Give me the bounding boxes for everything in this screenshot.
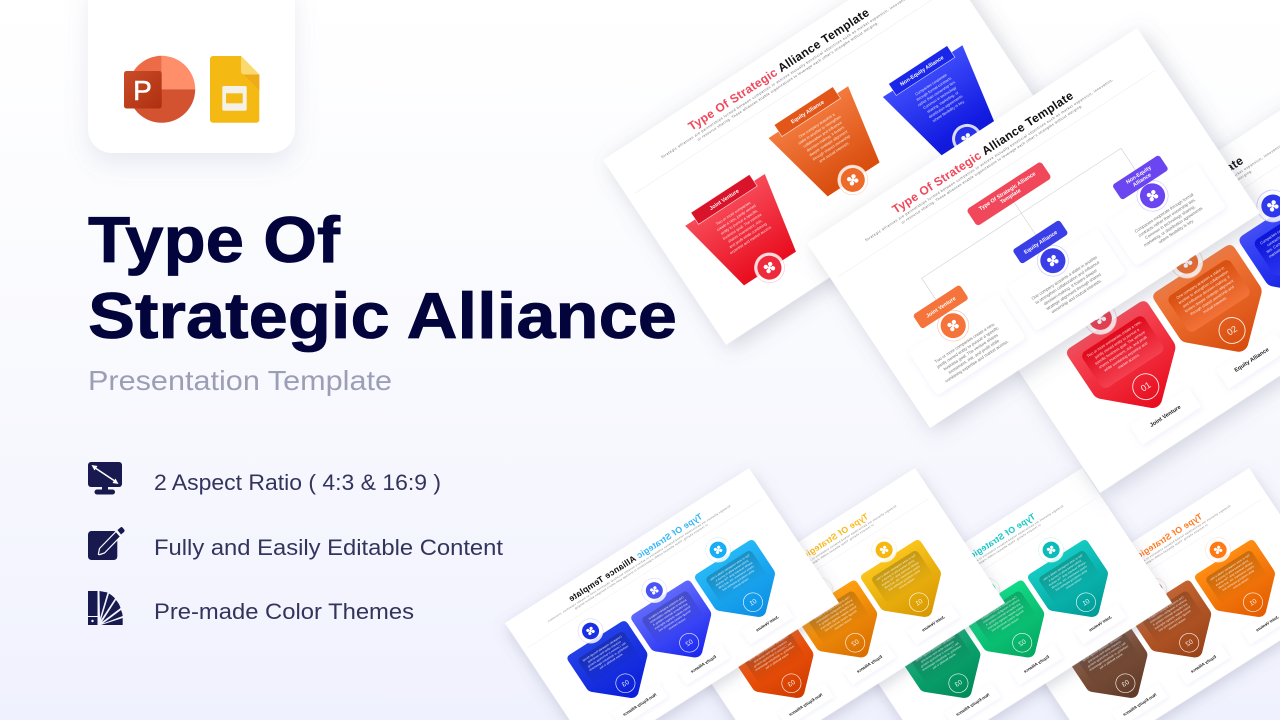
- slide: orange brown theme: where flexibility is key.: [1098, 652, 1123, 670]
- slide: blue theme: market access.: [731, 577, 749, 590]
- slide: orange brown theme: Non-Equity Alliance: [1121, 692, 1157, 717]
- slide: teal green theme: market access.: [1064, 577, 1082, 590]
- slide: orange brown theme: One company acquires a stake in: [1147, 595, 1184, 621]
- slide: yellow orange theme: contracts rather than ownership: [752, 640, 788, 664]
- slide: tree diagram layout: Template: [1000, 188, 1022, 206]
- slide: blue theme: ties. Common in technology sharing,: [586, 641, 626, 669]
- slide: teal green theme: jointly owned entity to pursue a: [1047, 558, 1083, 583]
- icon: color themes fan: [88, 591, 123, 625]
- slide: yellow orange theme: Companies cooperate through formal: [748, 634, 789, 662]
- slide: yellow orange theme: Two or more companies create a new,: [875, 553, 917, 582]
- slide: orange brown theme: or resource sharing. These alliances enable organizations to leverage each other's strengths without merging.: [1073, 523, 1208, 611]
- slide: blue theme: another to strengthen collaboration: [649, 598, 687, 624]
- slide: pentagon cards layout: market access.: [1117, 353, 1141, 370]
- slide: blue theme: One company acquires a stake in: [647, 595, 684, 621]
- slide: blue theme: and influence decision-making. It: [652, 602, 688, 627]
- slide: yellow orange theme: Joint Venture: [920, 614, 946, 633]
- feature: editable: Fully and Easily Editable Content: [154, 535, 504, 560]
- slide: yellow orange theme: and influence decision-making. It: [818, 602, 854, 627]
- slide: trapezoid layout: and profit while combining: [729, 222, 768, 249]
- slide: teal green theme: Non-Equity Alliance: [954, 692, 990, 717]
- slide: teal green theme: Type Of Strategic Alliance Template: [900, 511, 1037, 604]
- slide: blue theme: Joint Venture: [754, 614, 780, 633]
- slide: orange brown theme: jointly owned entity to pursue a: [1214, 558, 1250, 583]
- title: Strategic Alliance: [88, 279, 677, 352]
- slide: blue theme: Strategic alliances are partnerships formed between companies to achieve mutually beneficial objectives such as market expansion, innovation,: [546, 504, 731, 624]
- slide: yellow orange theme: ties. Common in technology sharing,: [752, 641, 792, 669]
- slide: teal green theme: ties. Common in technology sharing,: [919, 641, 959, 669]
- slide: orange brown theme: another to strengthen collaboration: [1149, 598, 1187, 624]
- slide: yellow orange theme: jointly owned entity to pursue a: [880, 558, 916, 583]
- slide: blue theme: 02: [684, 638, 695, 648]
- slide: teal green theme: Joint Venture: [1087, 614, 1113, 633]
- slide: pentagon cards layout: Two or more companies create a new,: [1086, 320, 1142, 358]
- slide: orange brown theme: contracts rather than ownership: [1086, 640, 1122, 664]
- slide: teal green theme: fosters deeper strategic alignment: [986, 605, 1024, 631]
- slide: blue theme: Two or more companies create a new,: [709, 553, 751, 582]
- slide: teal green theme: or resource sharing. These alliances enable organizations to leverage each other's strengths without merging.: [906, 523, 1041, 611]
- icon: PowerPoint: [124, 56, 195, 123]
- slide: pentagon cards layout: another to strengthen collaboration: [1178, 270, 1229, 305]
- slide: trapezoid layout: Non-Equity Alliance: [899, 55, 945, 88]
- slide: blue theme: mutual interests.: [667, 617, 686, 631]
- slide: blue theme: 01: [748, 598, 758, 608]
- slide: tree diagram layout: combining expertise and market access.: [944, 339, 1009, 384]
- slide: yellow orange theme: where flexibility is key.: [764, 652, 789, 670]
- slide: tree diagram layout: Alliance: [1132, 172, 1153, 188]
- slide: tree diagram layout: where flexibility is key.: [1157, 218, 1195, 244]
- slide: tree diagram layout: Type Of Strategic Alliance Template: [890, 88, 1076, 216]
- slide: pentagon cards layout: fosters deeper strategic alignment: [1184, 278, 1235, 314]
- slide: trapezoid layout: Type Of Strategic Alliance Template: [686, 5, 872, 133]
- slide: trapezoid layout: business goal. The venture: [722, 213, 762, 241]
- slide: pentagon cards layout: 02: [1225, 324, 1239, 337]
- slide: tree diagram layout: decision-making. It fosters deeper: [1043, 267, 1099, 306]
- slide: pentagon cards layout: shares investment, risk, and profit: [1098, 335, 1149, 370]
- slide: trapezoid layout: through shared ownership: [812, 134, 851, 162]
- slide: trapezoid layout: [603, 0, 1056, 345]
- slide: orange brown theme: 03: [1120, 679, 1131, 689]
- slide: teal green theme: contracts rather than ownership: [919, 640, 955, 664]
- slide: orange brown theme: Two or more companies create a new,: [1209, 553, 1251, 582]
- slide: tree diagram layout: marketing, or distribution agreements: [1143, 206, 1203, 248]
- slide: blue theme: Type Of Strategic Alliance Template: [567, 511, 704, 604]
- slide: teal green theme: 01: [1081, 598, 1091, 608]
- slide: teal green theme: Equity Alliance: [1022, 654, 1050, 674]
- slide: tree diagram layout: Non-Equity: [1125, 165, 1153, 186]
- slide: yellow orange theme: or resource sharing. These alliances enable organizations to leverage each other's strengths without merging.: [739, 523, 874, 611]
- feature: color themes: Pre-made Color Themes: [154, 599, 414, 624]
- slide: pentagon cards layout: while combining expertise and: [1104, 341, 1148, 372]
- slide: orange brown theme: through shared ownership and: [1157, 609, 1191, 633]
- slide: teal green theme: while combining expertise and: [1054, 569, 1088, 592]
- slide: tree diagram layout: ownership and mutual interests.: [1050, 278, 1103, 314]
- slide: trapezoid layout: shares investment, risk,: [727, 219, 763, 244]
- slide: trapezoid layout: stake in another to strengthen: [798, 115, 842, 146]
- slide: blue theme: marketing, or distribution agreements: [588, 644, 629, 672]
- slide: teal green theme: and influence decision-making. It: [985, 602, 1021, 627]
- slide: yellow orange theme: while combining expertise and: [887, 569, 921, 592]
- slide: tree diagram layout: jointly owned entity to pursue a specific: [935, 325, 999, 370]
- slide: pentagon cards layout: Type Of Strategic Alliance Template: [1060, 153, 1246, 281]
- slide: teal green theme: where flexibility is key.: [931, 652, 956, 670]
- slide: teal green theme: through shared ownership and: [990, 609, 1024, 633]
- feature: aspect ratio: 2 Aspect Ratio ( 4:3 & 16:9 ): [154, 470, 441, 495]
- slide: trapezoid layout: Two or more companies: [715, 201, 752, 226]
- slide: yellow orange theme: marketing, or distribution agreements: [754, 644, 795, 672]
- slide: orange brown theme: market access.: [1231, 577, 1249, 590]
- slide: orange brown theme: Companies cooperate through formal: [1082, 634, 1123, 662]
- slide: blue theme: jointly owned entity to pursue a: [714, 558, 750, 583]
- slide: trapezoid layout: where flexibility is key.: [932, 99, 965, 123]
- app icon card: [88, 0, 295, 153]
- slide: teal green theme: [838, 468, 1172, 720]
- slide: blue theme: while combining expertise and: [721, 569, 755, 592]
- icon: edit: [88, 527, 125, 560]
- slide: orange brown theme: and influence decision-making. It: [1152, 602, 1188, 627]
- slide: orange brown theme: specific business goal. The venture: [1214, 561, 1253, 587]
- slide: teal green theme: specific business goal. The venture: [1047, 561, 1086, 587]
- slide: pentagon cards layout: [977, 93, 1280, 493]
- icon: aspect ratio monitor: [88, 462, 122, 494]
- slide: blue theme: contracts rather than ownership: [586, 640, 622, 664]
- slide: tree diagram layout: Common in technology sharing,: [1144, 204, 1196, 240]
- slide: tree diagram layout: or resource sharing. These alliances enable organizations to leverage each other's strengths without merging.: [901, 104, 1083, 225]
- slide: blue theme: Non-Equity Alliance: [621, 692, 657, 717]
- slide: yellow orange theme: another to strengthen collaboration: [815, 598, 853, 624]
- slide: pentagon cards layout: and influence decision-making. It: [1182, 275, 1231, 309]
- slide: yellow orange theme: Strategic alliances are partnerships formed between companies to achieve mutually beneficial objectives such as market expansion, innovation,: [712, 504, 897, 624]
- slide: trapezoid layout: or resource sharing. These alliances enable organizations to leverage each other's strengths without merging.: [697, 21, 879, 142]
- slide: teal green theme: 03: [953, 679, 964, 689]
- slide: blue theme: fosters deeper strategic alignment: [653, 605, 691, 631]
- slide: tree diagram layout: to strengthen collaboration and influence: [1034, 259, 1101, 305]
- slide: tree diagram layout: Type Of Strategic Alliance: [978, 171, 1037, 212]
- slide: tree diagram layout: business goal. The venture shares: [942, 332, 999, 371]
- slide: trapezoid layout: deeper strategic alignment: [809, 129, 849, 157]
- slide: pentagon cards layout: specific business goal. The venture: [1094, 330, 1146, 366]
- slide: pentagon cards layout: Joint Venture: [1149, 405, 1182, 429]
- slide: trapezoid layout: create a new, jointly owned: [716, 204, 757, 232]
- slide: blue theme: Companies cooperate through formal: [582, 634, 623, 662]
- slide: orange brown theme: Strategic alliances are partnerships formed between companies to achieve mutually beneficial objectives such as market expansion, innovation,: [1046, 504, 1231, 624]
- slide: blue theme: or resource sharing. These alliances enable organizations to leverage each other's strengths without merging.: [573, 523, 708, 611]
- slide: pentagon cards layout: 01: [1139, 380, 1153, 394]
- slide: orange brown theme: marketing, or distribution agreements: [1088, 644, 1129, 672]
- slide: pentagon cards layout: Strategic alliances are partnerships formed between companies to achieve mutually beneficial objectives such as market expansion, innovation,: [1034, 143, 1280, 307]
- slide: yellow orange theme: shares investment, risk, and profit: [883, 564, 921, 590]
- slide: yellow orange theme: specific business goal. The venture: [880, 561, 919, 587]
- slide: orange brown theme: mutual interests.: [1167, 617, 1186, 631]
- slide: tree diagram layout: contracts rather than ownership ties.: [1137, 197, 1197, 238]
- slide: tree diagram layout: One company acquires a stake in another: [1030, 255, 1098, 301]
- slide: orange brown theme: Joint Venture: [1254, 614, 1280, 633]
- slide: tree diagram layout: Equity Alliance: [1023, 230, 1059, 256]
- slide: blue theme: Equity Alliance: [689, 654, 717, 674]
- slide: teal green theme: marketing, or distribution agreements: [921, 644, 962, 672]
- slide: yellow orange theme: fosters deeper strategic alignment: [819, 605, 857, 631]
- slide: yellow orange theme: [671, 468, 1005, 720]
- slide: orange brown theme: 01: [1248, 598, 1258, 608]
- slide: orange brown theme: Equity Alliance: [1189, 654, 1217, 674]
- slide: tree diagram layout: Two or more companies create a new,: [934, 321, 996, 364]
- slide: teal green theme: 02: [1017, 638, 1028, 648]
- slide: pentagon cards layout: through shared ownership and: [1190, 285, 1235, 316]
- slide: yellow orange theme: Equity Alliance: [855, 654, 883, 674]
- slide: teal green theme: One company acquires a stake in: [980, 595, 1017, 621]
- slide: blue theme: where flexibility is key.: [598, 652, 623, 670]
- slide: tree diagram layout: strategic alignment through shared: [1045, 271, 1102, 311]
- slide: orange brown theme: Type Of Strategic Alliance Template: [1067, 511, 1204, 604]
- title: [88, 203, 677, 352]
- slide: orange brown theme: [1005, 468, 1280, 720]
- slide: trapezoid layout: Equity Alliance: [790, 99, 826, 125]
- slide: trapezoid layout: collaboration and influence: [803, 121, 843, 149]
- slide: trapezoid layout: Companies cooperate: [914, 73, 948, 97]
- slide: yellow orange theme: 01: [914, 598, 924, 608]
- slide: trapezoid layout: rather than ownership ties.: [917, 80, 957, 107]
- slide: teal green theme: mutual interests.: [1000, 617, 1019, 631]
- slide: teal green theme: Strategic alliances are partnerships formed between companies to achieve mutually beneficial objectives such as market expansion, innovation,: [879, 504, 1064, 624]
- slide: teal green theme: Two or more companies create a new,: [1042, 553, 1084, 582]
- slide: trapezoid layout: through formal contracts: [916, 76, 952, 102]
- slide: yellow orange theme: Type Of Strategic Alliance Template: [733, 511, 870, 604]
- slide: trapezoid layout: distribution agreements: [928, 94, 964, 119]
- slide: yellow orange theme: 02: [850, 638, 861, 648]
- title: Type Of: [88, 203, 340, 276]
- slide: blue theme: specific business goal. The venture: [714, 561, 753, 587]
- slide: trapezoid layout: sharing, marketing, or: [926, 90, 960, 114]
- slide: yellow orange theme: mutual interests.: [833, 617, 852, 631]
- slide: tree diagram layout: [807, 28, 1260, 428]
- slide: trapezoid layout: expertise and market access.: [729, 225, 773, 255]
- slide: pentagon cards layout: jointly owned entity to pursue a: [1093, 327, 1141, 360]
- slide: teal green theme: another to strengthen collaboration: [982, 598, 1020, 624]
- slide: orange brown theme: 02: [1184, 638, 1195, 648]
- slide: yellow orange theme: through shared ownership and: [823, 609, 857, 633]
- slide: trapezoid layout: entity to pursue a specific: [720, 209, 758, 236]
- slide: blue theme: 03: [620, 679, 631, 689]
- slide: pentagon cards layout: or resource sharing. These alliances enable organizations to leverage each other's strengths without merging.: [1071, 169, 1253, 290]
- slide: tree diagram layout: investment, risk, and profit while: [947, 338, 1001, 375]
- slide: orange brown theme: shares investment, risk, and profit: [1217, 564, 1255, 590]
- slide: tree diagram layout: Joint Venture: [925, 296, 957, 320]
- slide: orange brown theme: ties. Common in technology sharing,: [1086, 641, 1126, 669]
- slide: trapezoid layout: decision-making. It fosters: [806, 125, 845, 153]
- slide: trapezoid layout: Common in technology: [923, 86, 957, 110]
- slide: orange brown theme: fosters deeper strategic alignment: [1153, 605, 1191, 631]
- slide: trapezoid layout: One company acquires a: [798, 113, 836, 139]
- slide: teal green theme: Companies cooperate through formal: [915, 634, 956, 662]
- slide: blue theme: shares investment, risk, and profit: [717, 564, 755, 590]
- slide: teal green theme: shares investment, risk, and profit: [1050, 564, 1088, 590]
- slide: yellow orange theme: 03: [786, 679, 797, 689]
- slide: yellow orange theme: One company acquires a stake in: [813, 595, 850, 621]
- icon: PowerPoint: P: [133, 75, 152, 106]
- slide: pentagon cards layout: Equity Alliance: [1234, 347, 1270, 374]
- icon: Google Slides: [210, 56, 259, 123]
- slide: trapezoid layout: Joint Venture: [709, 188, 741, 212]
- subtitle: Presentation Template: [88, 365, 392, 396]
- slide: orange brown theme: while combining expertise and: [1221, 569, 1255, 592]
- slide: tree diagram layout: Strategic alliances are partnerships formed between companies to achieve mutually beneficial objectives such as market expansion, innovation,: [864, 78, 1114, 242]
- slide: tree diagram layout: Companies cooperate through formal: [1134, 192, 1194, 234]
- slide: pentagon cards layout: One company acquires a stake in: [1176, 266, 1225, 300]
- slide: pentagon cards layout: mutual interests.: [1202, 296, 1228, 314]
- slide: blue theme: through shared ownership and: [657, 609, 691, 633]
- slide: yellow orange theme: market access.: [897, 577, 915, 590]
- slide: yellow orange theme: Non-Equity Alliance: [787, 692, 823, 717]
- slide: blue theme: [505, 468, 839, 720]
- slide: trapezoid layout: and mutual interests.: [819, 141, 850, 164]
